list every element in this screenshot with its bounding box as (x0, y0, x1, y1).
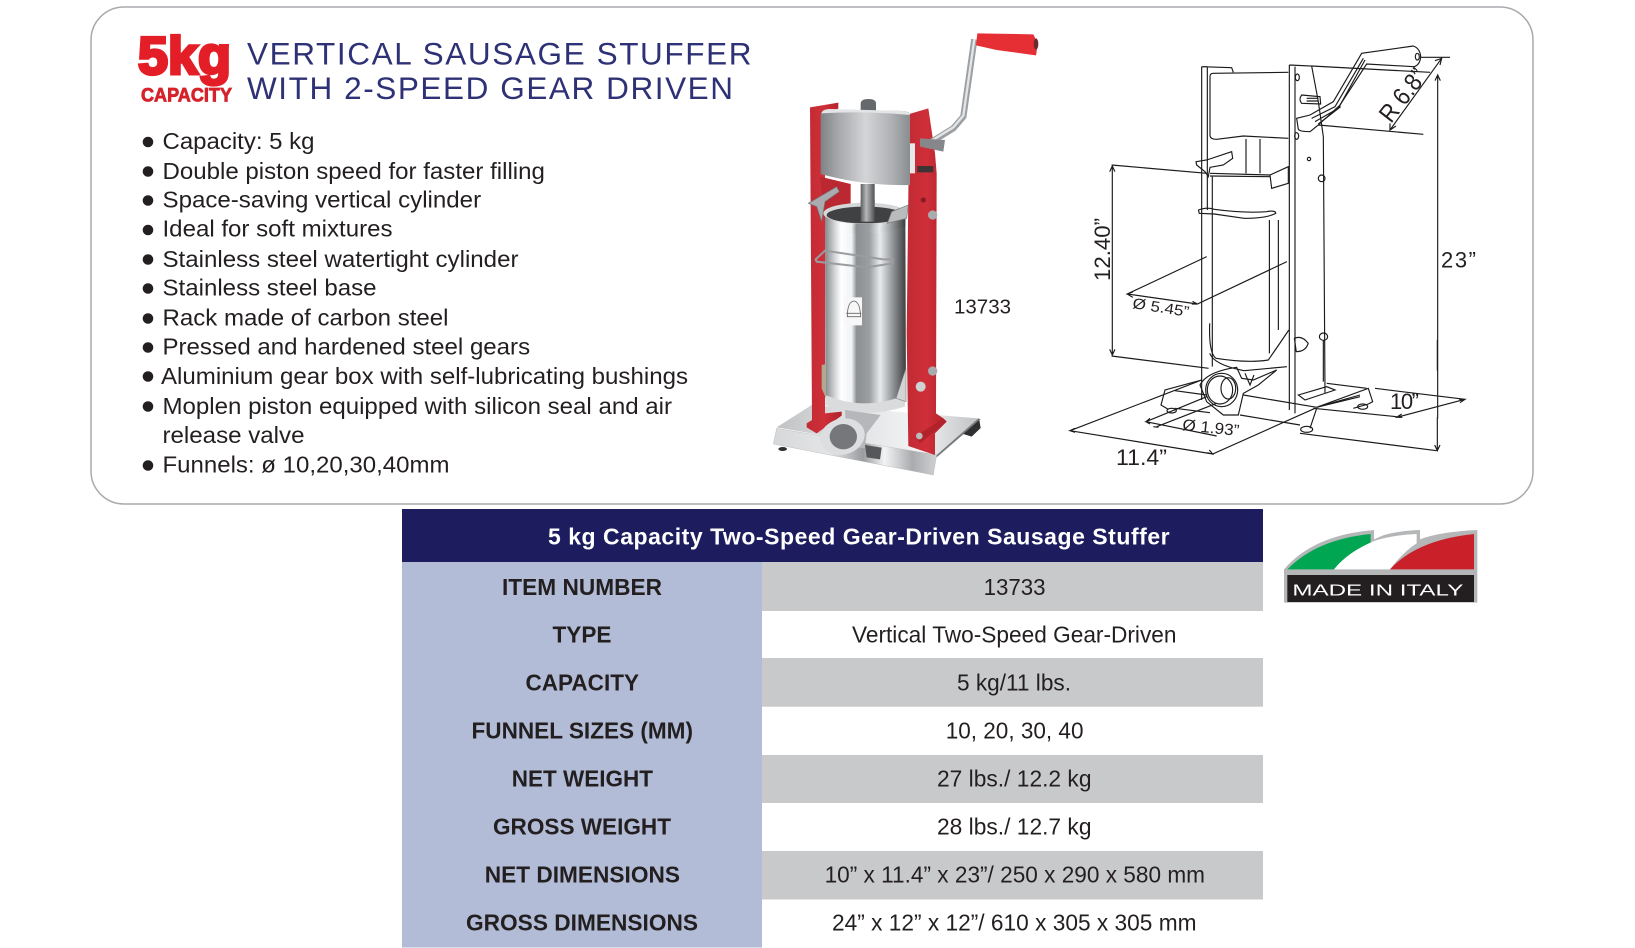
feature list: release valve (162, 422, 304, 448)
row: gross dimensions: 24” x 12” x 12”/ 610 x 305 x 305 mm (832, 910, 1196, 936)
feature list: Stainless steel watertight cylinder (162, 246, 519, 272)
technical line drawing with dimensions: 11.4” (1116, 445, 1167, 470)
title (247, 36, 752, 106)
row: gross weight: 28 lbs./ 12.7 kg (937, 814, 1092, 840)
row: net dimensions (485, 862, 1205, 888)
feature list: Double piston speed for faster filling (162, 158, 545, 184)
technical line drawing with dimensions: R 6.8” (1374, 63, 1433, 128)
row: net dimensions: 10” x 11.4” x 23”/ 250 x 290 x 580 mm (825, 862, 1205, 888)
made in italy badge (1284, 530, 1477, 603)
row: type: TYPE (552, 622, 612, 648)
feature list: Ideal for soft mixtures (162, 216, 392, 242)
row: item number: 13733 (984, 574, 1046, 600)
row: funnel sizes: FUNNEL SIZES (MM) (472, 718, 693, 744)
feature list: Pressed and hardened steel gears (162, 334, 530, 360)
feature list: Stainless steel base (162, 275, 376, 301)
row: item number (502, 574, 1046, 600)
row: gross dimensions: GROSS DIMENSIONS (466, 910, 698, 936)
label column (402, 562, 762, 948)
feature list: Aluminium gear box with self-lubricating bushings (161, 363, 688, 389)
feature list: Rack made of carbon steel (162, 305, 448, 331)
row: net weight: NET WEIGHT (512, 766, 653, 792)
title: WITH 2-SPEED GEAR DRIVEN (247, 70, 733, 106)
feature list (143, 128, 688, 478)
row: funnel sizes: 10, 20, 30, 40 (946, 718, 1084, 744)
value row backgrounds (762, 562, 1263, 900)
row: net weight: 27 lbs./ 12.2 kg (937, 766, 1092, 792)
technical line drawing with dimensions: 12.40” (1090, 218, 1115, 281)
product code: 13733 (954, 296, 1011, 318)
row: type (552, 622, 1176, 648)
row: gross weight: GROSS WEIGHT (493, 814, 671, 840)
drawing: cylinder (1110, 165, 1328, 371)
capacity badge: CAPACITY (141, 84, 232, 106)
technical line drawing with dimensions (1070, 46, 1476, 470)
row: net weight (512, 766, 1092, 792)
panel: product overview (91, 7, 1533, 504)
row: gross dimensions (466, 910, 1196, 936)
table header (402, 509, 1263, 562)
feature list: Capacity: 5 kg (162, 128, 314, 154)
technical line drawing with dimensions: Ø 1.93” (1182, 417, 1240, 440)
row: gross weight (493, 814, 1092, 840)
row: funnel sizes (472, 718, 1084, 744)
drawing: base and funnel (1070, 340, 1465, 454)
technical line drawing with dimensions: Ø 5.45” (1131, 295, 1190, 321)
drawing: upper machine body (1196, 46, 1450, 418)
table header: 5 kg Capacity Two-Speed Gear-Driven Sausage Stuffer (548, 524, 1170, 550)
row: capacity: 5 kg/11 lbs. (957, 670, 1071, 696)
row: net dimensions: NET DIMENSIONS (485, 862, 680, 888)
title: VERTICAL SAUSAGE STUFFER (247, 36, 752, 72)
row: capacity: CAPACITY (526, 670, 639, 696)
product photo: red sausage stuffer (773, 33, 1038, 475)
feature list: Funnels: ø 10,20,30,40mm (162, 452, 450, 478)
technical line drawing with dimensions: 23” (1441, 248, 1476, 273)
feature list: Space-saving vertical cylinder (162, 187, 481, 213)
row: capacity (526, 670, 1071, 696)
made in italy badge: MADE IN ITALY (1292, 583, 1464, 600)
feature list: Moplen piston equipped with silicon seal and air (162, 393, 672, 419)
capacity badge: 5kg (138, 27, 231, 86)
specification table (402, 509, 1263, 948)
row: type: Vertical Two-Speed Gear-Driven (852, 622, 1176, 648)
row: item number: ITEM NUMBER (502, 574, 662, 600)
technical line drawing with dimensions: 10” (1390, 389, 1419, 414)
